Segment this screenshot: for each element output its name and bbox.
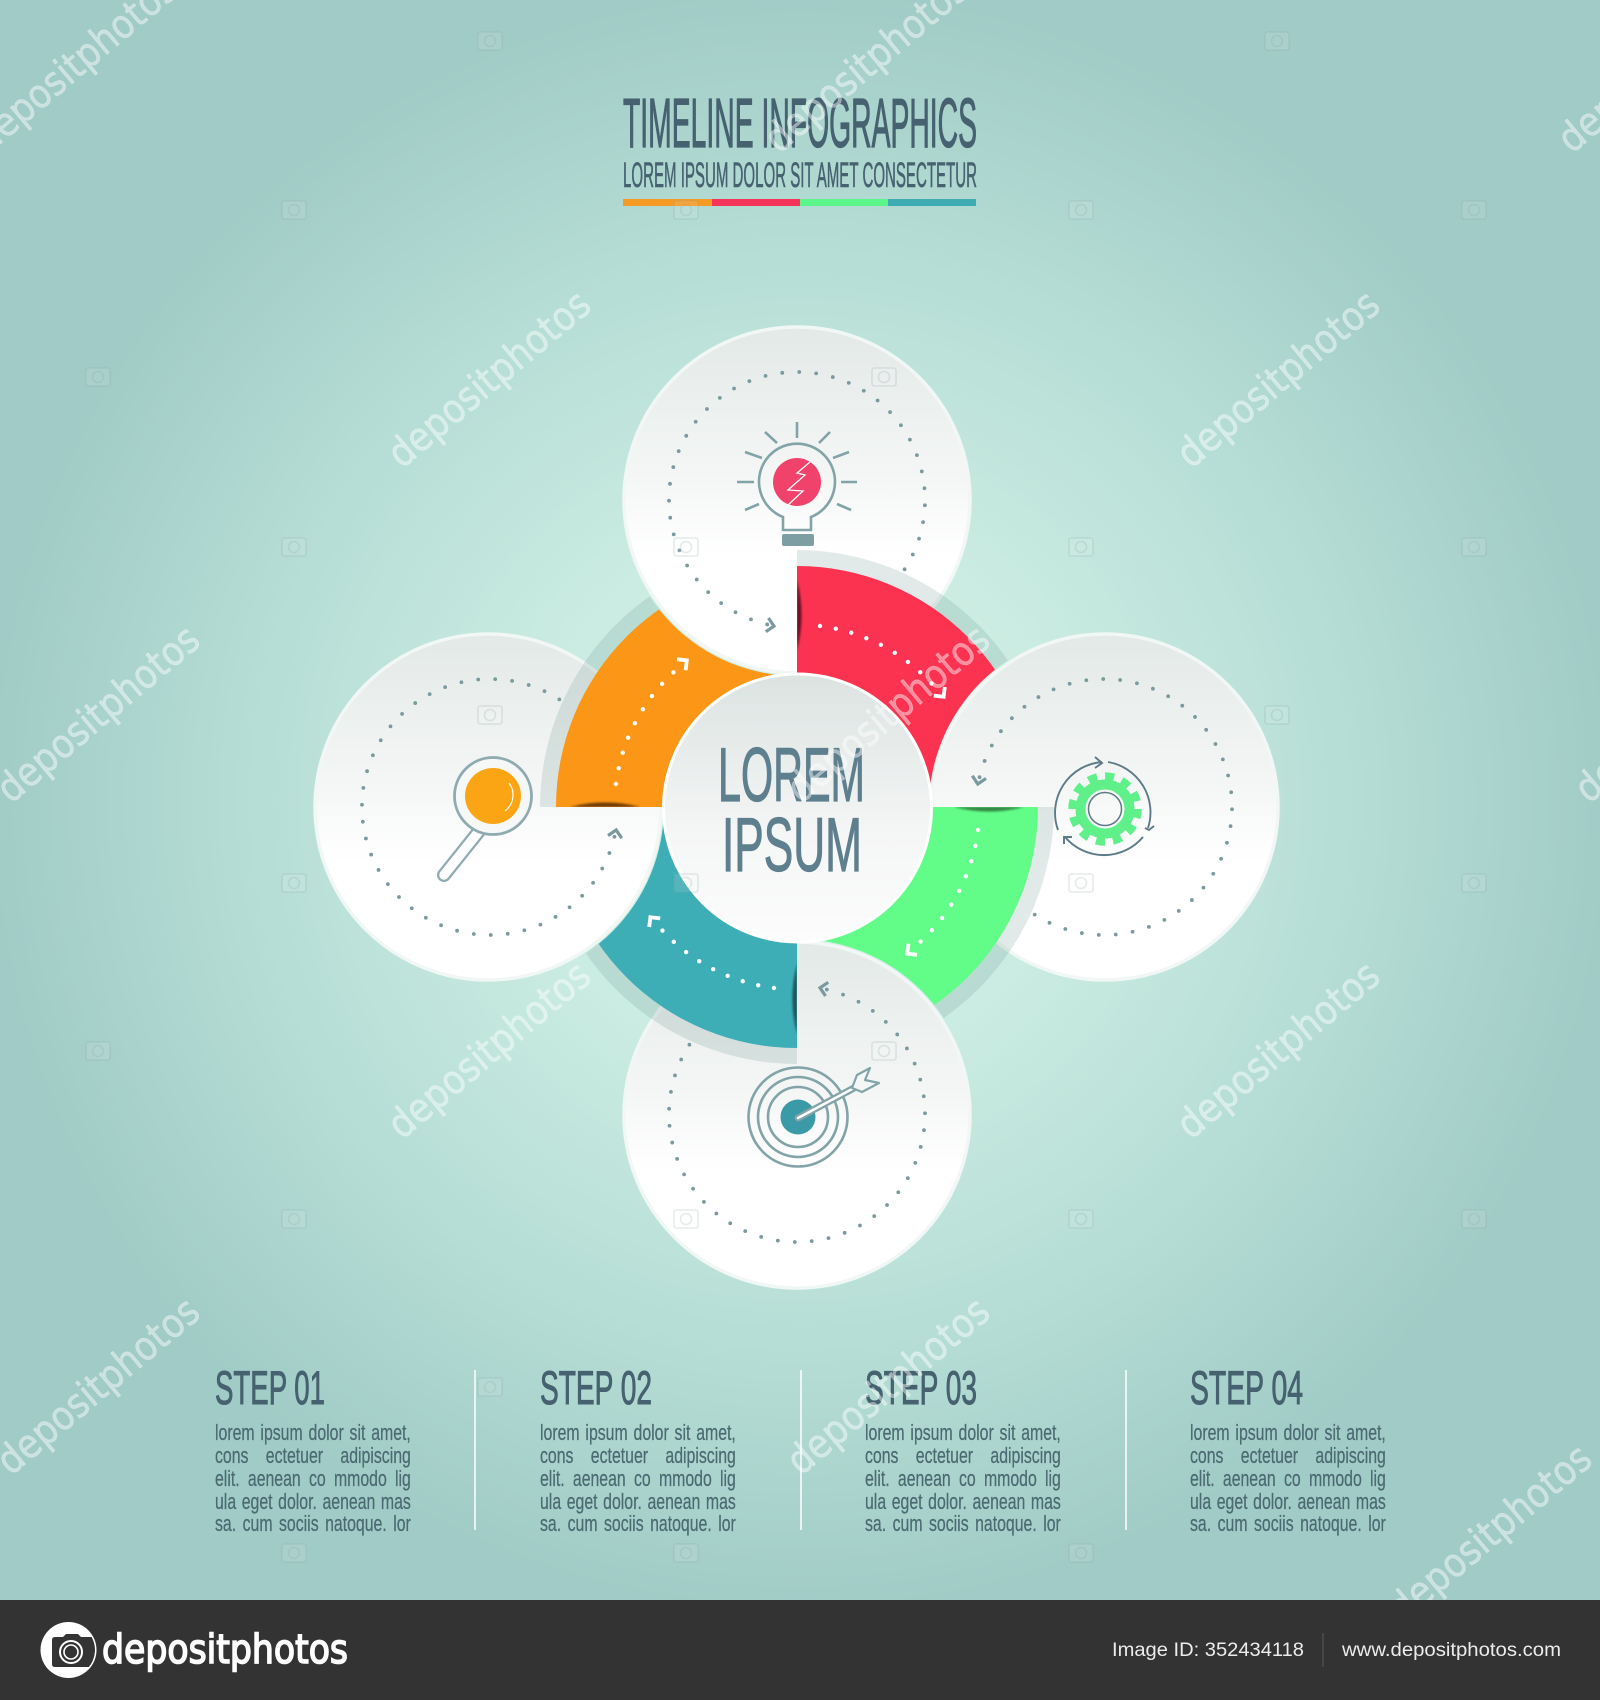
step 1: sa. cum sociis natoque. lor: [215, 1511, 411, 1536]
step 4: elit. aenean co mmodo lig: [1190, 1466, 1386, 1491]
step 4: [1190, 1365, 1386, 1536]
orange ring segment: [540, 596, 774, 807]
red ring segment: [797, 550, 1008, 784]
main graphic: TIMELINE INFOGRAPHICS: [623, 84, 977, 162]
divider: [474, 1370, 476, 1530]
step 3: sa. cum sociis natoque. lor: [865, 1511, 1061, 1536]
icon: magnifying glass: [444, 758, 532, 875]
main graphic: LOREM IPSUM DOLOR SIT AMET CONSECTETUR: [623, 156, 977, 195]
footer bar: [0, 1600, 1600, 1700]
step 2: elit. aenean co mmodo lig: [540, 1466, 736, 1491]
step 2: ula eget dolor. aenean mas: [540, 1489, 736, 1514]
watermark layer: depositphotos: [379, 952, 600, 1148]
panel: bottom circle: [624, 942, 970, 1288]
step 4: ula eget dolor. aenean mas: [1190, 1489, 1386, 1514]
divider: [800, 1370, 802, 1530]
step 2: sa. cum sociis natoque. lor: [540, 1511, 736, 1536]
step 1: elit. aenean co mmodo lig: [215, 1466, 411, 1491]
step 3: ula eget dolor. aenean mas: [865, 1489, 1061, 1514]
centre label: IPSUM: [722, 803, 862, 888]
green ring segment: [824, 807, 1054, 1018]
logo wordmark: depositphotos: [102, 1627, 348, 1673]
step 2: [540, 1365, 736, 1536]
icon: target and arrow: [748, 1068, 879, 1166]
icon: camera logo: [40, 1622, 96, 1678]
centre label: [718, 733, 865, 888]
step 2: cons ectetuer adipiscing: [540, 1443, 736, 1468]
website url: www.depositphotos.com: [1341, 1639, 1561, 1661]
step 4: sa. cum sociis natoque. lor: [1190, 1511, 1386, 1536]
step 2: lorem ipsum dolor sit amet,: [540, 1420, 736, 1445]
step 3: cons ectetuer adipiscing: [865, 1443, 1061, 1468]
watermark layer: depositphotos: [379, 281, 600, 477]
centre label: LOREM: [718, 733, 865, 818]
watermark layer: depositphotos: [778, 1288, 999, 1484]
panel: right circle: [932, 634, 1278, 980]
step 1: lorem ipsum dolor sit amet,: [215, 1420, 411, 1445]
image id: Image ID: 352434118: [1112, 1639, 1304, 1661]
teal ring segment: [586, 824, 797, 1064]
step 4: lorem ipsum dolor sit amet,: [1190, 1420, 1386, 1445]
step 4: cons ectetuer adipiscing: [1190, 1443, 1386, 1468]
centre circle: [664, 674, 932, 942]
watermark layer: depositphotos: [1168, 281, 1389, 477]
main graphic: [313, 98, 1280, 1290]
step 3: elit. aenean co mmodo lig: [865, 1466, 1061, 1491]
step 1: cons ectetuer adipiscing: [215, 1443, 411, 1468]
title colour bar: [623, 199, 976, 206]
icon: gear: [1055, 757, 1154, 855]
panel: top circle: [624, 327, 970, 673]
step 3: [865, 1365, 1061, 1536]
watermark layer: depositphotos: [778, 616, 999, 812]
panel: left circle: [315, 634, 661, 980]
step 1: [215, 1365, 411, 1536]
watermark layer: depositphotos: [1168, 952, 1389, 1148]
icon: light bulb: [737, 422, 857, 546]
step 3: lorem ipsum dolor sit amet,: [865, 1420, 1061, 1445]
divider: [1125, 1370, 1127, 1530]
step 1: ula eget dolor. aenean mas: [215, 1489, 411, 1514]
